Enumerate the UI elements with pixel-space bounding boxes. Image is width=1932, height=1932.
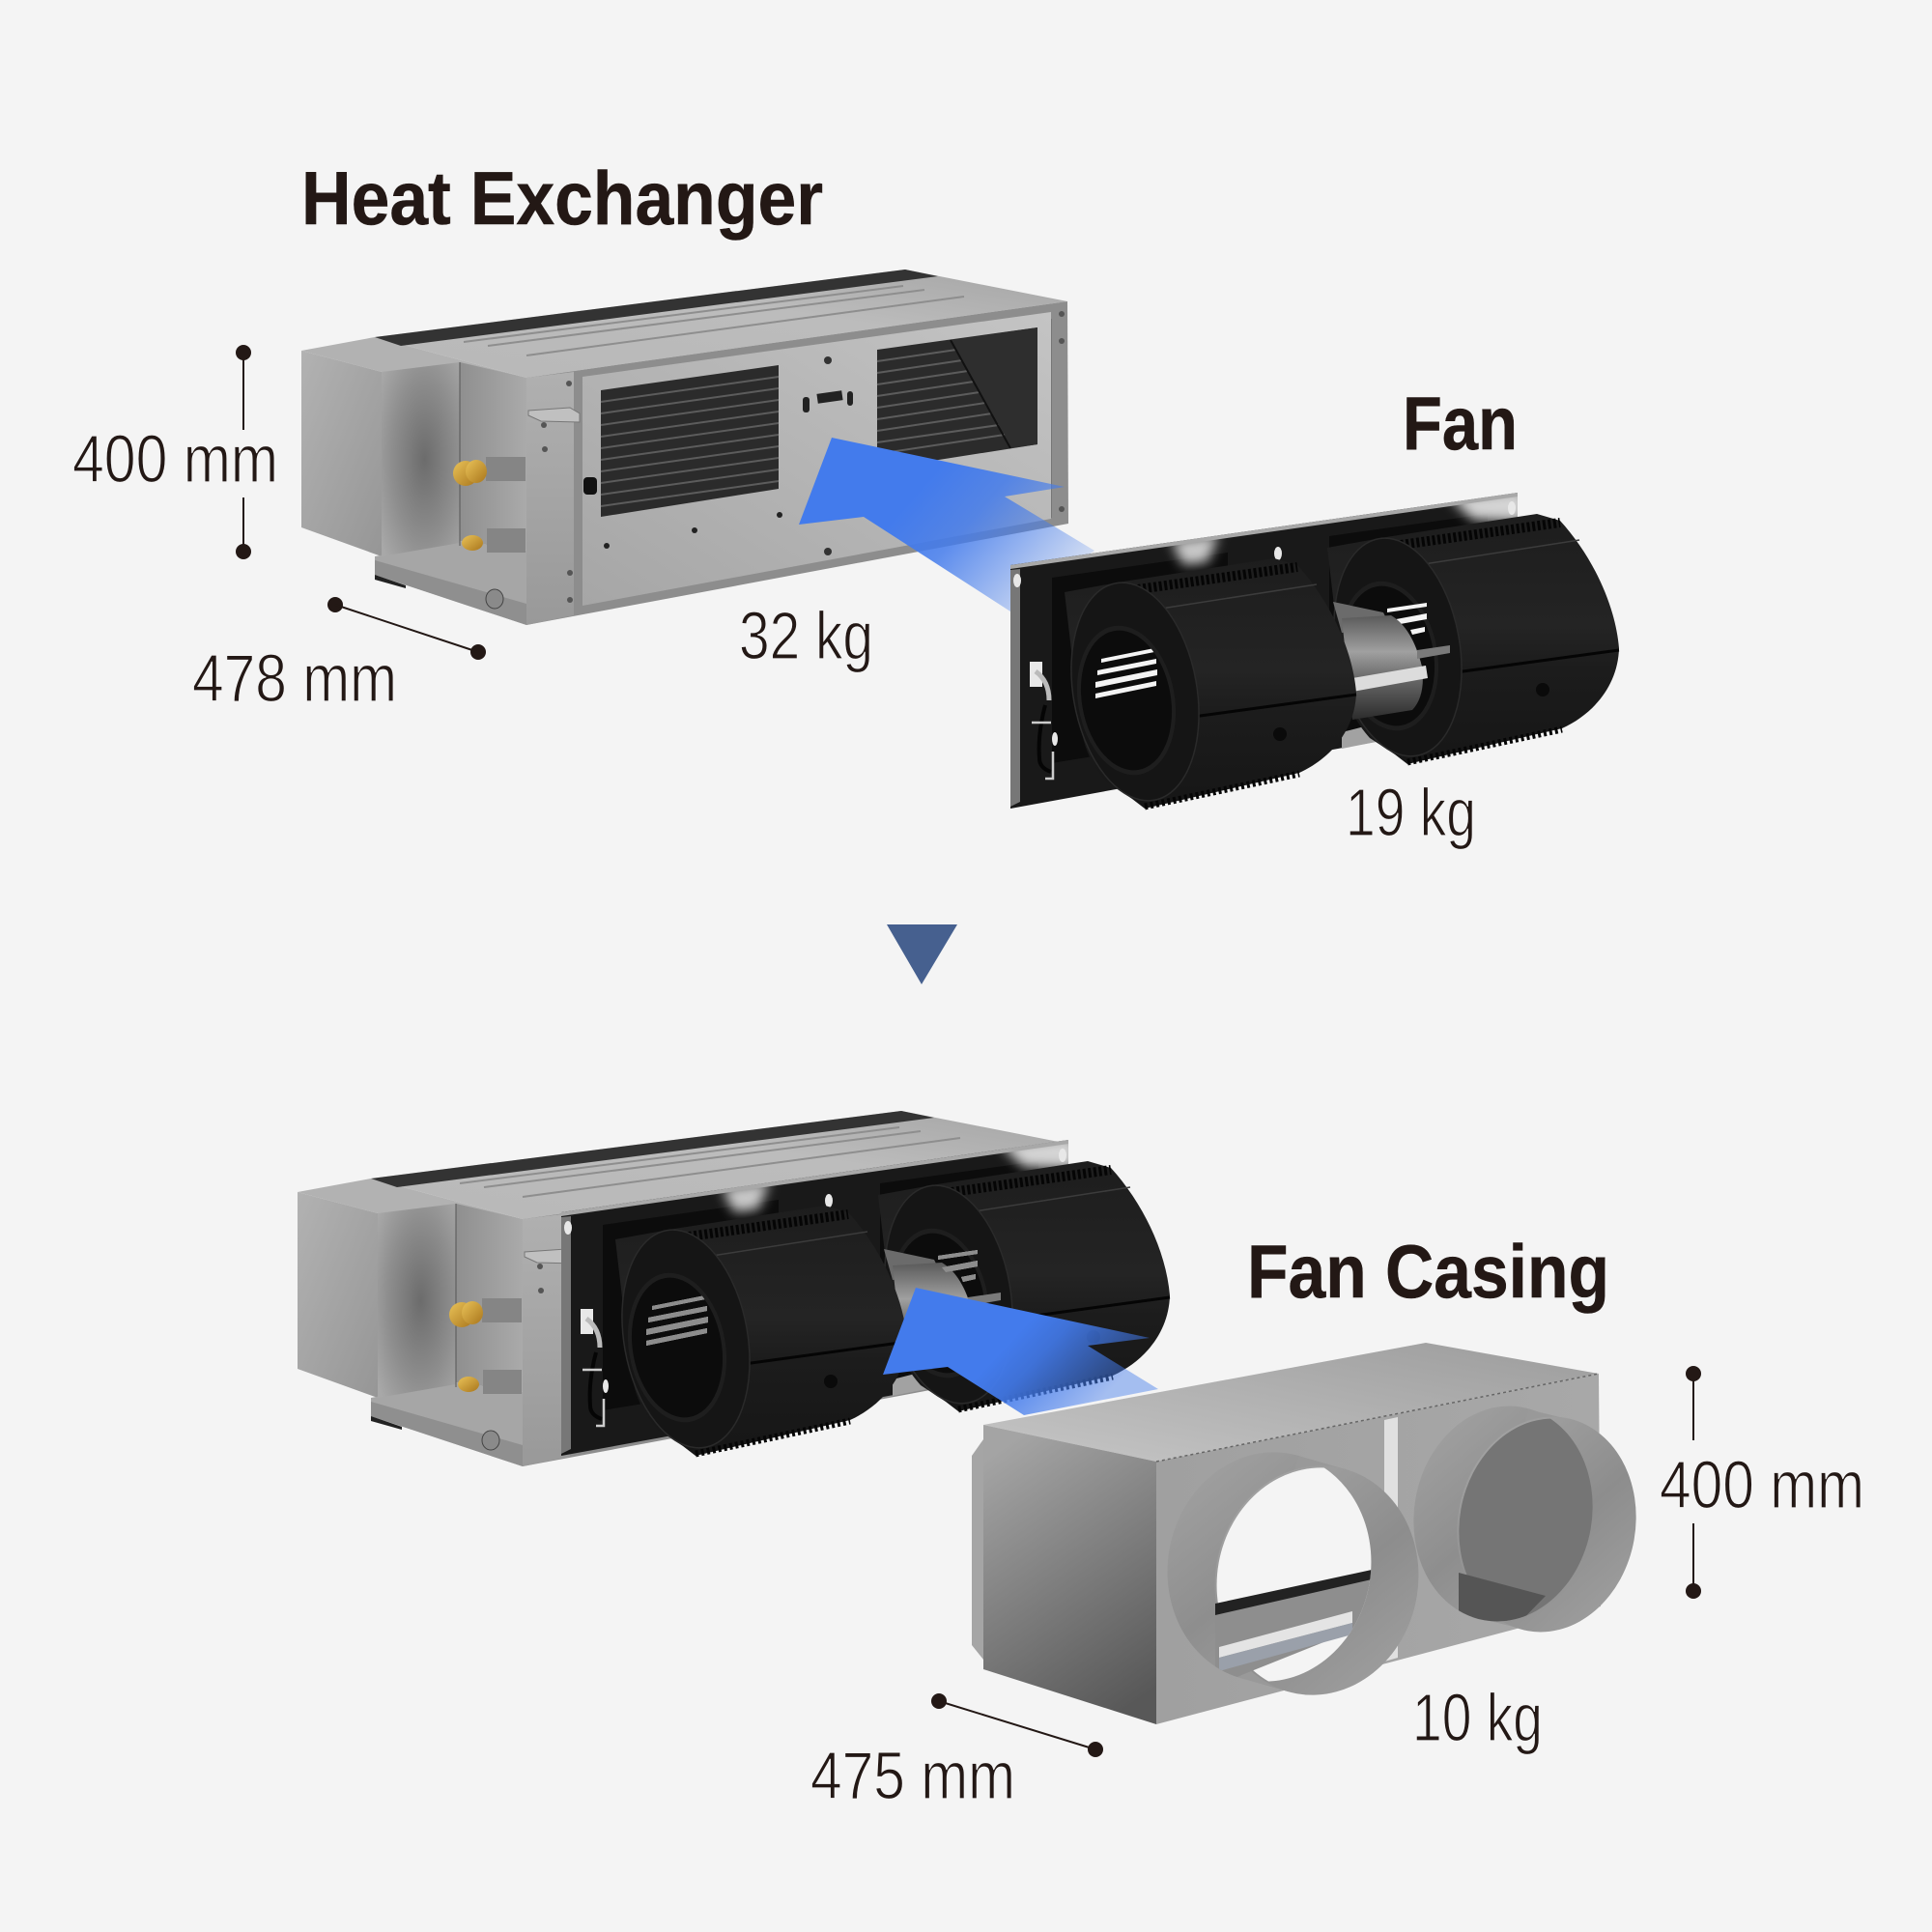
heading: Heat Exchanger: Heat Exchanger <box>301 156 823 241</box>
label: 478 mm depth: 478 mm <box>192 640 397 716</box>
casing flange <box>972 1439 983 1660</box>
label: 19 kg: 19 kg <box>1346 775 1476 850</box>
right ring <box>1414 1406 1636 1633</box>
casing depth dimension <box>931 1693 1103 1757</box>
heat exchanger unit <box>301 270 1068 625</box>
casing top <box>983 1343 1599 1462</box>
heading: Fan: Fan <box>1403 381 1518 466</box>
left ring <box>1167 1453 1418 1695</box>
heat exchanger depth dimension <box>327 597 486 660</box>
heat exchanger height dimension <box>236 345 251 559</box>
label: 475 mm casing depth: 475 mm <box>810 1738 1015 1813</box>
label: 400 mm casing height: 400 mm <box>1660 1447 1864 1522</box>
fan assembly <box>1010 488 1619 810</box>
front panel with coil grilles <box>582 312 1051 606</box>
casing left face <box>983 1425 1156 1724</box>
label: 10 kg: 10 kg <box>1412 1680 1543 1755</box>
heading: Fan Casing: Fan Casing <box>1247 1229 1609 1314</box>
assembled unit: heat exchanger with fan <box>298 1111 1170 1466</box>
label: 400 mm height: 400 mm <box>72 421 278 497</box>
fan casing <box>972 1343 1653 1724</box>
down arrow between steps <box>887 924 957 984</box>
arrow: fan into heat exchanger <box>799 438 1094 611</box>
arrow: casing into assembled unit <box>883 1288 1158 1415</box>
label: 32 kg: 32 kg <box>739 598 873 673</box>
casing front face <box>1156 1374 1601 1724</box>
casing height dimension <box>1686 1366 1701 1599</box>
